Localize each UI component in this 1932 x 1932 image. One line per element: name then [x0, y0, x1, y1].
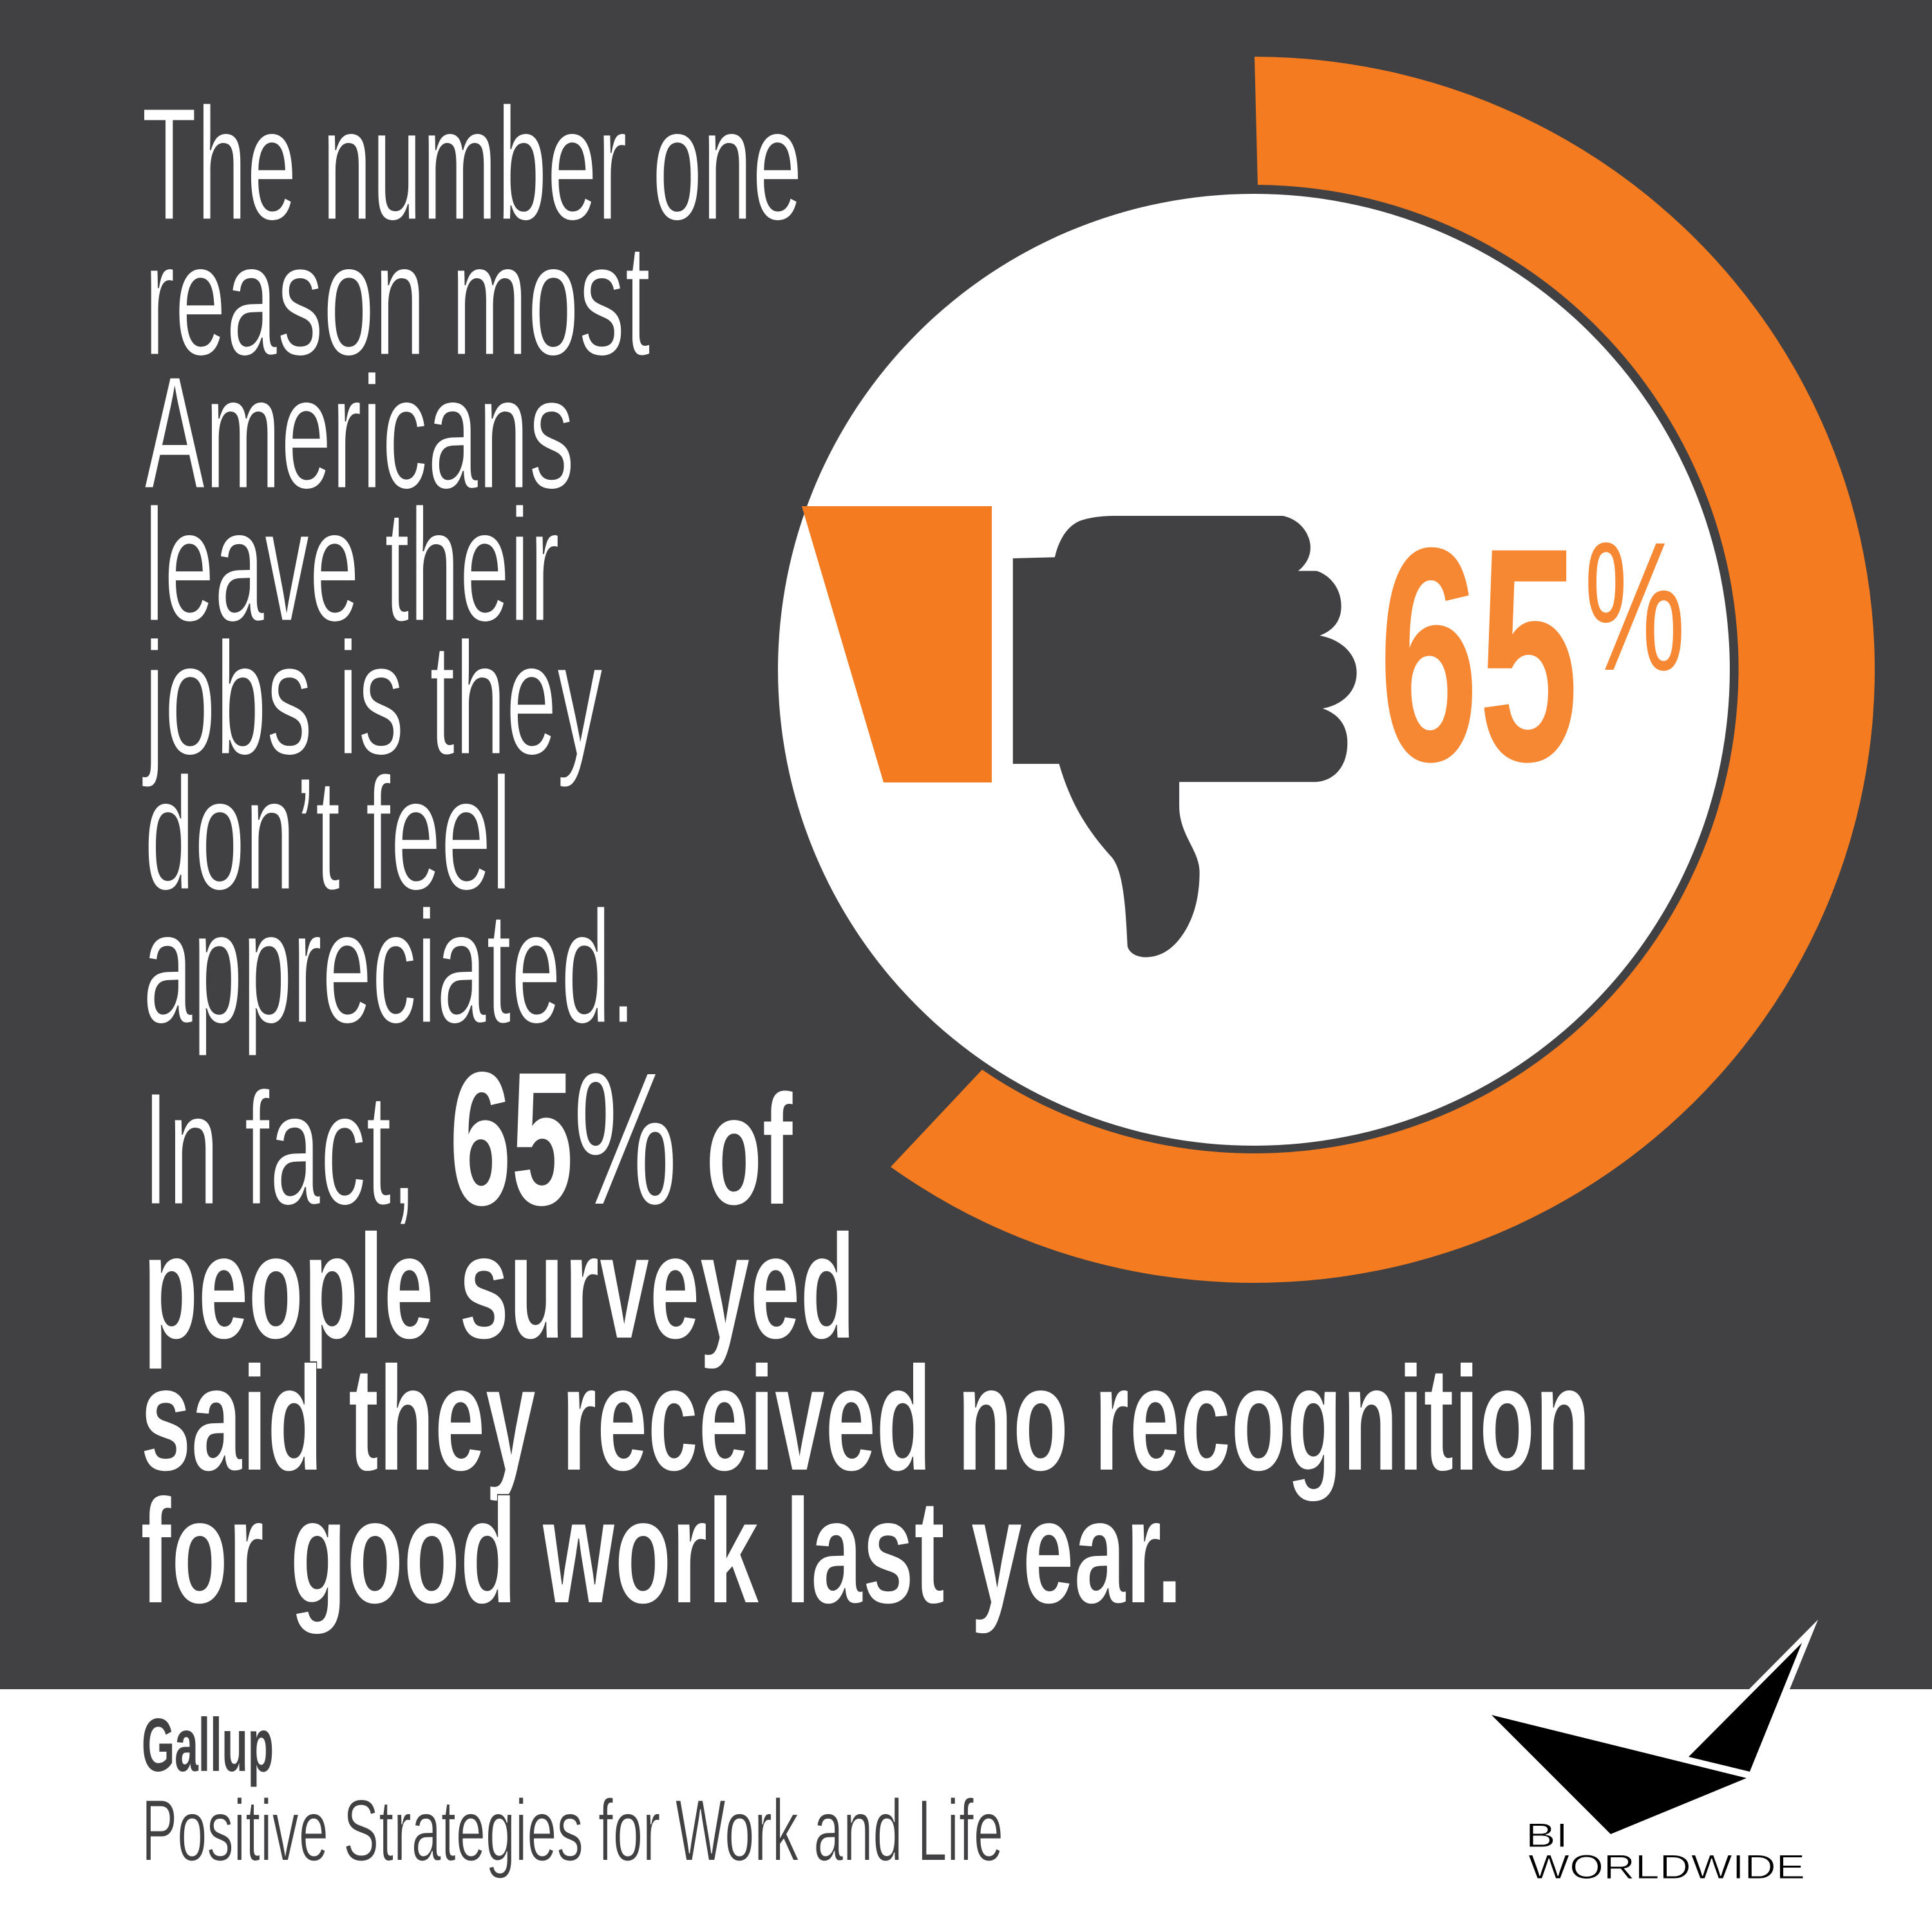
text block: 65% of people surveyed: for good work last year.: [140, 1468, 1182, 1635]
source credit: Gallup: [142, 1703, 274, 1787]
text block: number one reason: jobs is they: [142, 609, 603, 788]
text block: 65% of people surveyed: %: [573, 1032, 677, 1245]
orange cuff: [802, 506, 992, 782]
text block: 65% of people surveyed: of: [706, 1061, 793, 1238]
white inner circle: [778, 194, 1730, 1146]
text block: 65% of people surveyed: In fact,: [143, 1059, 417, 1238]
text block: number one reason: The number one: [142, 74, 802, 254]
icon: thumbs down with orange cuff: [802, 506, 1357, 957]
text block: number one reason: Americans: [144, 343, 574, 522]
text block: number one reason: [142, 74, 802, 1057]
donut chart: 65 percent: [778, 57, 1875, 1283]
text block: number one reason: reason most: [144, 209, 650, 389]
donut label: 65%: [1379, 485, 1685, 825]
text block: 65% of people surveyed: 65: [450, 1032, 573, 1245]
text block: 65% of people surveyed: [140, 1032, 1591, 1635]
text block: number one reason: appreciated.: [143, 877, 636, 1057]
logo: BI Worldwide: BI: [1526, 1817, 1568, 1855]
orange ring arc: [891, 57, 1875, 1283]
thumb down hand: [1013, 516, 1357, 957]
text block: 65% of people surveyed: people surveyed: [143, 1204, 855, 1370]
text block: number one reason: leave their: [144, 475, 560, 655]
digits 65: 65: [1379, 485, 1578, 825]
logo: BI Worldwide: [1492, 1620, 1818, 1886]
source credit: Positive Strategies for Work and Life: [142, 1781, 1003, 1879]
text block: number one reason: don’t feel: [144, 744, 511, 923]
logo: BI Worldwide: WORLDWIDE: [1528, 1848, 1805, 1886]
percent sign: %: [1584, 504, 1685, 709]
source credit: [142, 1703, 1003, 1879]
footer white band: [0, 1689, 1932, 1932]
